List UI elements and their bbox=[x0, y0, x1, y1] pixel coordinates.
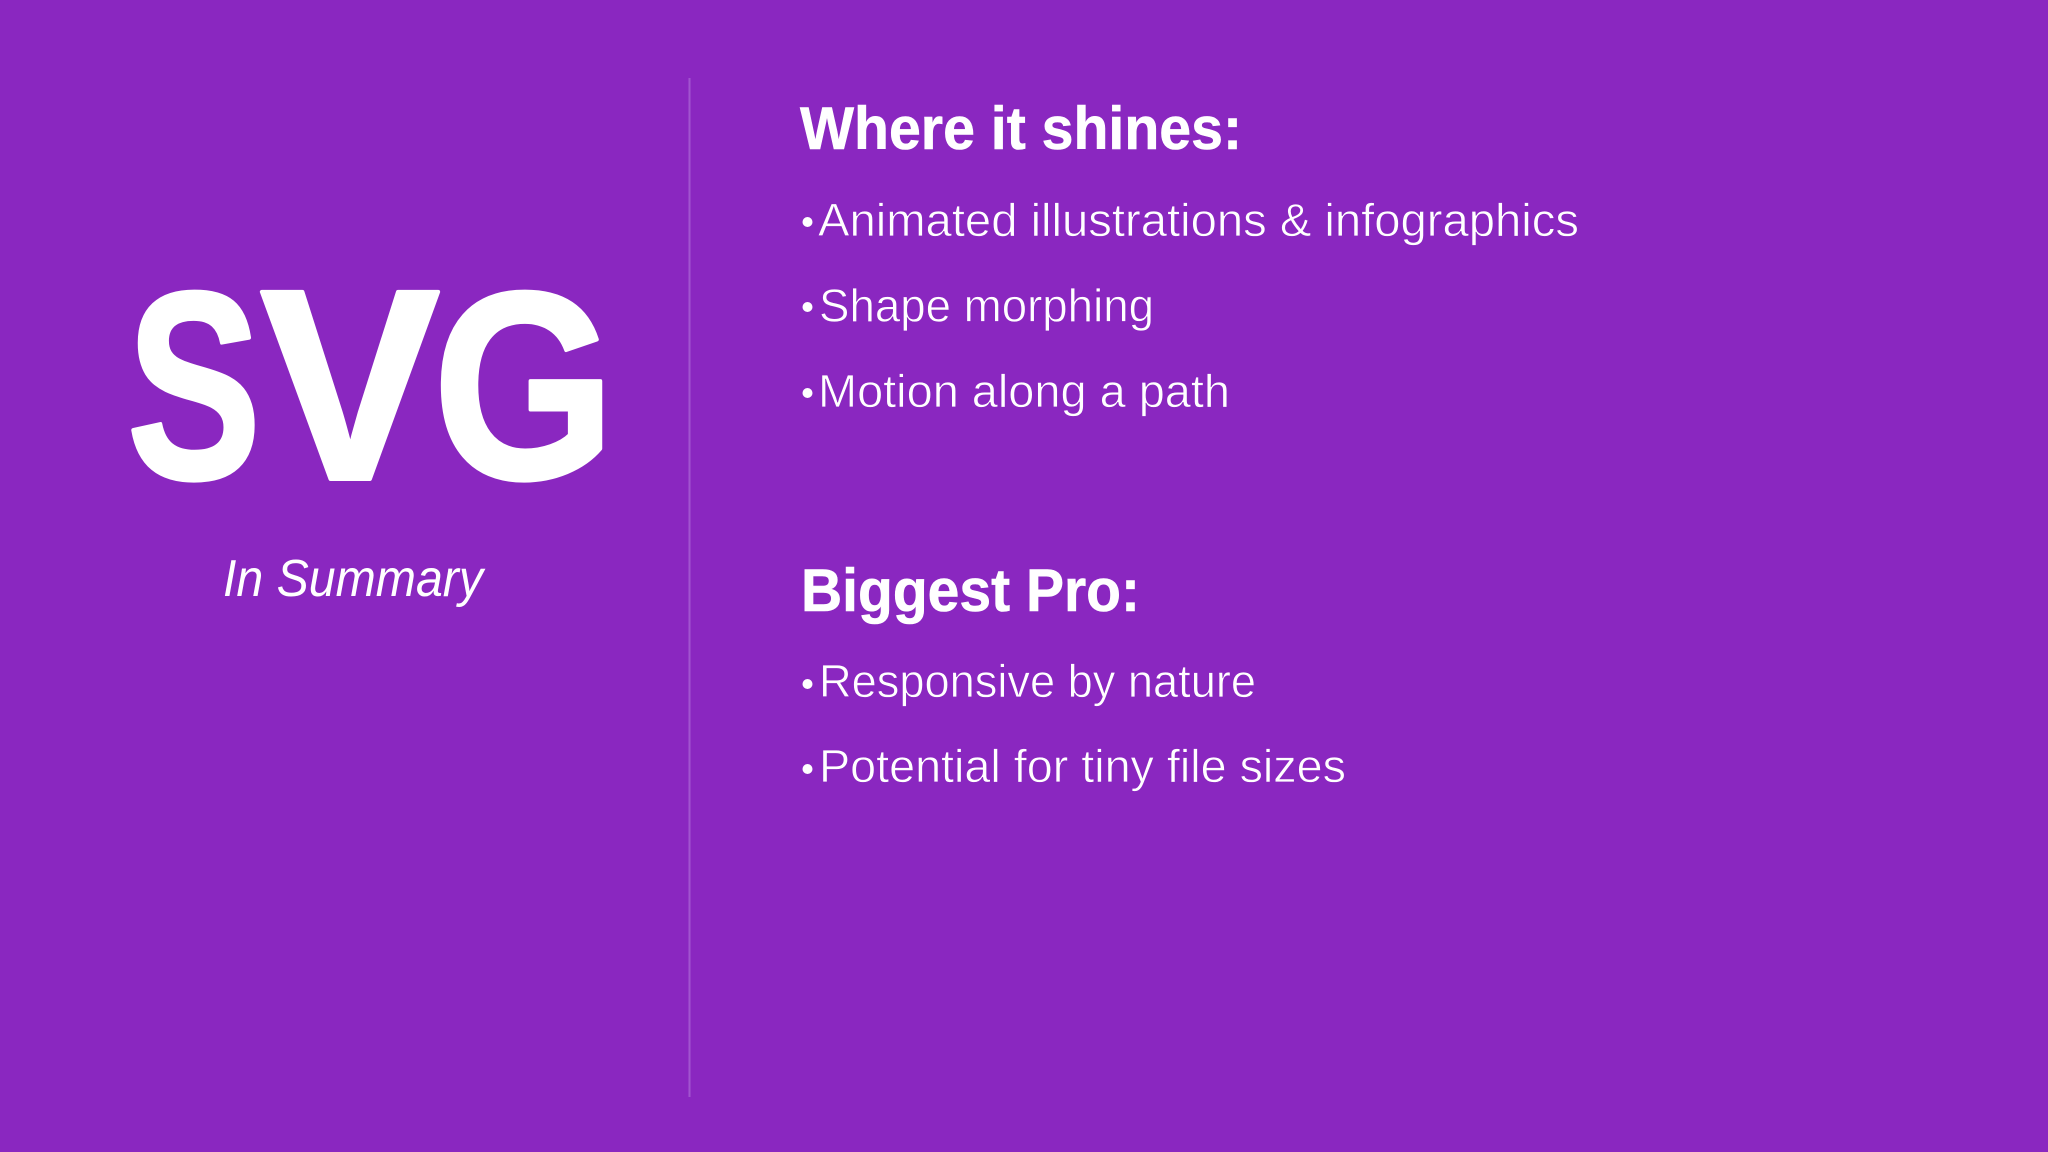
panel: left title bbox=[127, 233, 615, 608]
divider bbox=[688, 78, 690, 1097]
big title SVG: S bbox=[127, 236, 261, 535]
panel: where it shines bbox=[800, 95, 1579, 417]
panel: biggest pro bbox=[801, 557, 1346, 792]
list item: animated illustrations: Animated illustrations & infographics bbox=[818, 194, 1579, 246]
subtitle: In Summary bbox=[223, 550, 486, 608]
heading: biggest pro: Biggest Pro: bbox=[801, 557, 1140, 624]
big title SVG: G bbox=[433, 236, 615, 535]
list item: shape morphing: Shape morphing bbox=[819, 280, 1154, 332]
list item: potential for tiny file sizes: Potential for tiny file sizes bbox=[819, 740, 1346, 792]
big title SVG bbox=[127, 233, 615, 537]
list item: motion along a path: Motion along a path bbox=[818, 365, 1230, 417]
heading: where it shines: Where it shines: bbox=[800, 95, 1242, 162]
list item: responsive by nature: Responsive by nature bbox=[819, 655, 1256, 707]
big title SVG: V bbox=[260, 233, 441, 537]
